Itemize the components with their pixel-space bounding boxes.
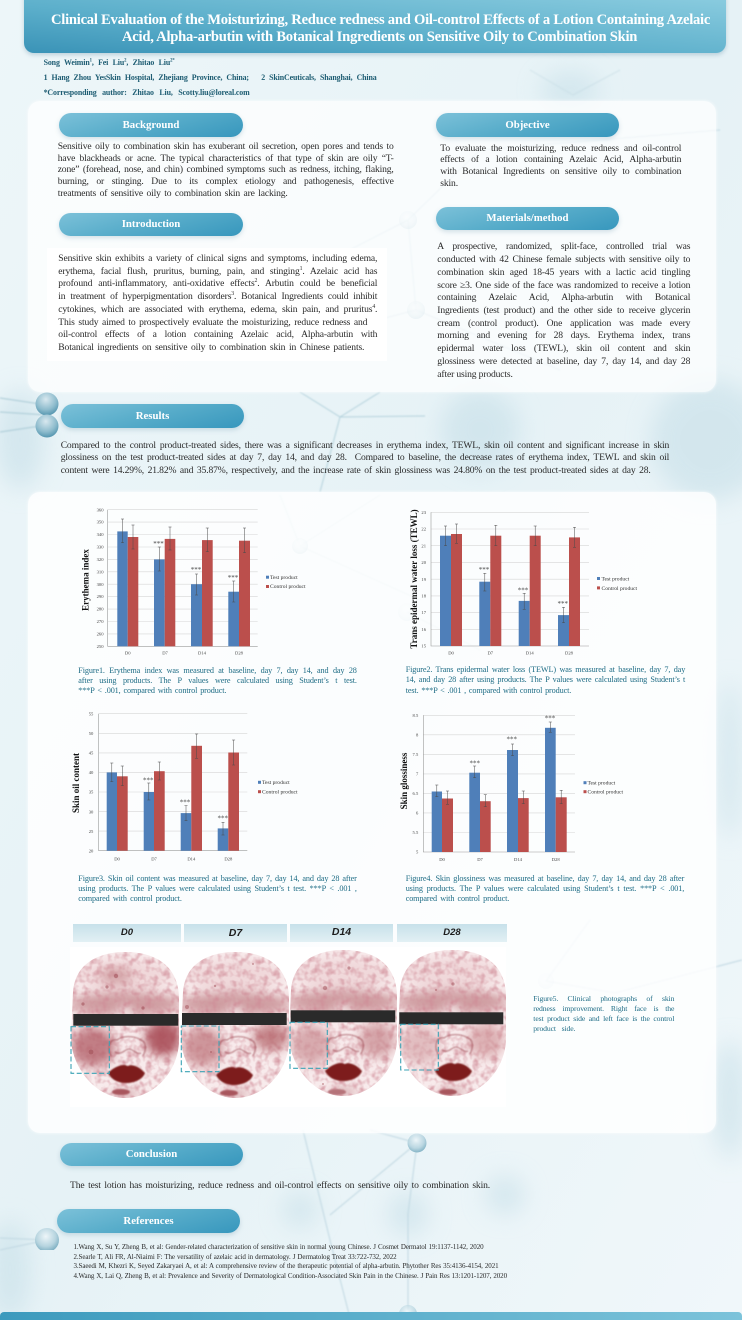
text: conclusion: The test lotion has moisturizing, reduce redness and oil-control effects on sensitive oily to combination skin.: [70, 1180, 490, 1191]
bar chart: skin glossiness: D0: [439, 857, 446, 862]
bar chart: skin oil content: 25: [89, 829, 94, 834]
text: background: Sensitive oily to combination skin has exuberant oil secretion, open pores and tends to: [58, 141, 394, 152]
label: D7: D7: [229, 927, 242, 939]
text: materials and method: after using products.: [437, 369, 513, 380]
text: materials and method: A prospective, randomized, split-face, controlled trial was: [437, 241, 690, 252]
heading: Introduction: Introduction: [122, 218, 180, 230]
bar chart: skin glossiness: Control product: [588, 790, 624, 796]
caption: figure 2: 14, and day 28 after using products. The P values were calculated using Student’s t: [406, 675, 685, 684]
bar chart: erythema index: 290: [97, 594, 104, 599]
caption: figure 2: test. ***P < .001 , compared with control product.: [406, 686, 571, 695]
heading: Background: Background: [123, 119, 179, 131]
text: background: zone” (forehead, nose, and chin) combined symptoms such as redness, itching, flaking,: [58, 164, 394, 175]
caption: figure 1: after using products. The P values were calculated using Student’s t test.: [78, 676, 357, 685]
bar chart: skin glossiness: [399, 713, 624, 862]
bar chart: skin glossiness: Test product: [588, 781, 616, 787]
caption: figure 2: [406, 665, 686, 695]
text: materials and method: combination skin aged 18-45 years with a lactic acid tingling: [437, 267, 690, 278]
authors and affiliations: Song Weimin1, Fei Liu2, Zhitao Liu2*: [44, 58, 175, 67]
bar chart: skin oil content: ***: [217, 815, 228, 823]
bar chart: erythema index: 360: [97, 507, 104, 512]
heading: Results: Results: [136, 410, 169, 422]
bar chart: skin oil content: 50: [89, 731, 94, 736]
bar chart: erythema index: 280: [97, 607, 104, 612]
bar chart: skin oil content: D0: [114, 856, 121, 861]
heading: Materials/method: [436, 207, 619, 230]
bar chart: trans epidermal water loss: 16: [421, 627, 427, 632]
bar chart: erythema index: Erythema index: [80, 549, 90, 611]
text: objective: with Botanical Ingredients on sensitive oily to combination: [440, 166, 681, 177]
bar chart: skin glossiness: 7: [416, 772, 419, 777]
bar chart: trans epidermal water loss: ***: [557, 600, 568, 608]
bar chart: trans epidermal water loss: 23: [421, 510, 427, 515]
bar chart: erythema index: 300: [97, 582, 104, 587]
heading: References: [57, 1209, 240, 1233]
face: D0: [69, 950, 181, 1100]
caption: figure 3: using products. The P values were calculated using Student’s t test. ***P < .001 ,: [78, 884, 357, 893]
bar chart: skin oil content: 45: [89, 751, 94, 756]
bar chart: skin glossiness: D28: [552, 857, 560, 862]
text: introduction: in treatment of hyperpigmentation disorders3. Botanical Ingredients could inhibit: [58, 291, 377, 302]
bar chart: erythema index: ***: [191, 566, 202, 574]
label: D14: [290, 924, 393, 942]
bar chart: trans epidermal water loss: ***: [518, 587, 529, 595]
bar chart: trans epidermal water loss: 17: [421, 610, 427, 615]
bar chart: trans epidermal water loss: [409, 509, 638, 656]
heading: Materials/method: Materials/method: [486, 212, 569, 224]
heading: Objective: Objective: [505, 119, 550, 131]
bar chart: erythema index: Control product: [270, 584, 306, 590]
text: materials and method: conducted with 42 Chinese female subjects with sensitive oily to: [437, 254, 690, 265]
label: D0: [73, 924, 181, 942]
label: D28: D28: [443, 927, 461, 938]
bar chart: skin oil content: D28: [224, 856, 233, 861]
authors and affiliations: [43, 58, 468, 1160]
text: background: [58, 141, 394, 199]
text: background: treatments of sensitive oily to combination skin are lacking.: [58, 188, 288, 199]
text: introduction: Sensitive skin exhibits a variety of clinical signs and symptoms, including edema,: [58, 253, 377, 264]
bar chart: skin glossiness: ***: [506, 735, 517, 743]
text: results: content were 14.29%, 21.82% and 35.87%, respectively, and the increase rate of skin glossiness was 24.80% on the test product-treated sides at day 28.: [61, 465, 651, 476]
bar chart: trans epidermal water loss: 19: [421, 577, 427, 582]
bar chart: skin oil content: 30: [89, 809, 94, 814]
caption: figure 1: ***P < .001, compared with control product.: [78, 686, 226, 695]
bar chart: erythema index: D14: [198, 651, 207, 656]
bar chart: trans epidermal water loss: 15: [421, 644, 427, 649]
caption: figure 3: compared with control product.: [78, 894, 182, 903]
text: results: [61, 440, 670, 476]
bar chart: skin oil content: [71, 711, 298, 861]
bar chart: trans epidermal water loss: 21: [421, 543, 427, 548]
text: references: 1.Wang X, Su Y, Zheng B, et al: Gender-related characterization of sensitive skin in normal young Chinese. J Cosmet Dermatol 19:1137-1142, 2020: [74, 1243, 484, 1251]
bar chart: skin oil content: D7: [151, 856, 158, 861]
bar chart: trans epidermal water loss: 20: [421, 560, 427, 565]
bar chart: erythema index: 330: [97, 545, 104, 550]
caption: figure 5: redness improvement. Right face is the: [533, 1004, 674, 1013]
caption: figure 4: compared with control product.: [406, 894, 509, 903]
title banner: Acid, Alpha-arbutin with Botanical Ingredients on Sensitive Oily to Combination Skin: [122, 29, 637, 45]
bar chart: trans epidermal water loss: D7: [487, 651, 494, 656]
face: D28: [396, 948, 508, 1098]
text: background: burning, or stinging. Due to its complex etiology and pathogenesis, effective: [58, 176, 394, 187]
caption: figure 5: test product side and left face is the control: [533, 1014, 674, 1023]
bar chart: erythema index: 310: [97, 569, 104, 574]
heading: Background: [59, 113, 243, 137]
text: introduction: [47, 248, 387, 361]
text: references: 4.Wang X, Lai Q, Zheng B, et al: Prevalence and Severity of Dermatological Condition-Associated Skin Pain in the Chinese. J Pain Res 13:1201-1207, 2020: [74, 1272, 507, 1280]
bar chart: erythema index: 270: [97, 619, 104, 624]
caption: figure 5: Figure5. Clinical photographs of skin: [533, 994, 674, 1003]
icon: twin spheres: [36, 392, 58, 438]
bar chart: skin oil content: Test product: [262, 780, 290, 786]
title banner: [24, 0, 726, 53]
panel: top content: [28, 101, 716, 392]
bar chart: trans epidermal water loss: Test product: [602, 576, 630, 582]
label: D14: D14: [332, 926, 351, 938]
caption: figure 3: Figure3. Skin oil content was measured at baseline, day 7, day 14, and day 28 after: [78, 874, 357, 883]
bar chart: skin oil content: Control product: [262, 790, 298, 796]
bar chart: skin oil content: ***: [143, 776, 154, 784]
bar chart: erythema index: 350: [97, 520, 104, 525]
bar chart: skin glossiness: 6.5: [413, 791, 419, 796]
bar chart: skin oil content: 55: [89, 711, 94, 716]
text: introduction: erythema, facial flush, pruritus, burning, pain, and stinging1. Azelaic acid has: [58, 266, 377, 277]
caption: figure 4: Figure4. Skin glossiness was measured at baseline, day 7, day 14, and day 28 after: [406, 874, 684, 883]
bar chart: erythema index: ***: [153, 540, 164, 548]
caption: figure 5: [533, 994, 674, 1033]
bar chart: erythema index: 260: [97, 632, 104, 636]
bar chart: skin glossiness: 5: [416, 850, 419, 855]
text: objective: To evaluate the moisturizing, reduce redness and oil-control: [440, 143, 681, 154]
bar chart: skin glossiness: ***: [469, 760, 480, 768]
heading: Results: [61, 404, 244, 428]
bar chart: skin oil content: 40: [89, 770, 94, 775]
heading: Conclusion: Conclusion: [126, 1148, 177, 1160]
text: references: [74, 1243, 507, 1280]
face: D14: [287, 948, 399, 1098]
bar chart: skin glossiness: 8.5: [413, 713, 419, 718]
bar chart: skin glossiness: Skin glossiness: [399, 752, 409, 809]
heading: References: References: [123, 1215, 174, 1227]
bar chart: trans epidermal water loss: Control product: [602, 586, 638, 592]
authors and affiliations: 1 Hang Zhou YesSkin Hospital, Zhejiang Province, China; 2 SkinCeuticals, Shanghai, China: [44, 73, 377, 82]
bar chart: trans epidermal water loss: D0: [448, 651, 455, 656]
text: materials and method: glossiness were detected at baseline, day 7, day 14, and day 28: [437, 356, 690, 367]
bar chart: erythema index: [80, 507, 306, 656]
bar chart: erythema index: D0: [125, 651, 131, 656]
caption: figure 4: [406, 874, 684, 903]
bar chart: erythema index: 320: [97, 557, 104, 562]
footer banner: [0, 1312, 742, 1320]
bar chart: skin glossiness: D14: [514, 857, 523, 862]
bar chart: skin oil content: ***: [180, 799, 191, 807]
bar chart: erythema index: 250: [97, 644, 104, 649]
bar chart: skin oil content: Skin oil content: [71, 753, 81, 813]
face: D7: [179, 950, 291, 1100]
caption: figure 3: [78, 874, 357, 903]
text: introduction: oil-control effects of a lotion containing Azelaic acid, Alpha-arbutin with: [58, 329, 377, 340]
panel: results figures: [28, 492, 716, 1133]
bar chart: skin oil content: D14: [187, 856, 196, 861]
caption: figure 5: product side.: [533, 1024, 575, 1033]
caption: figure 1: [78, 666, 357, 695]
bar chart: trans epidermal water loss: ***: [479, 566, 490, 574]
text: objective: [440, 143, 682, 189]
text: objective: skin.: [440, 178, 458, 189]
bar chart: trans epidermal water loss: D14: [526, 651, 534, 656]
text: results: Compared to the control product-treated sides, there was a significant decreases in erythema index, TEWL, skin oil content and significant increase in skin: [61, 440, 669, 451]
bar chart: skin glossiness: ***: [545, 715, 556, 723]
text: introduction: profound anti-inflammatory, anti-oxidative effects2. Arbutin could be beneficial: [58, 278, 377, 289]
heading: Conclusion: [60, 1143, 243, 1166]
text: references: 3.Saeedi M, Khezri K, Seyed Zakaryaei A, et al: A comprehensive review of the therapeutic potential of alpha-arbutin. Phytother Res 35:4136-4154, 2021: [74, 1262, 498, 1270]
bar chart: trans epidermal water loss: 22: [421, 527, 427, 532]
title banner: Clinical Evaluation of the Moisturizing, Reduce redness and Oil-control Effects of a Lotion Containing Azelaic: [51, 12, 710, 28]
bar chart: trans epidermal water loss: D28: [565, 651, 574, 656]
text: introduction: Botanical ingredients on sensitive oily to combination skin in Chinese patients.: [58, 342, 364, 353]
text: objective: effects of a lotion containing Azelaic Acid, Alpha-arbutin: [440, 154, 681, 165]
label: D0: D0: [121, 927, 133, 938]
caption: figure 2: Figure2. Trans epidermal water loss (TEWL) was measured at baseline, day 7, day: [406, 665, 685, 674]
authors and affiliations: *Corresponding author: Zhitao Liu, Scotty.liu@loreal.com: [44, 88, 250, 97]
text: materials and method: morning and evening for 28 days. Erythema index, trans: [437, 330, 690, 341]
bar chart: trans epidermal water loss: Trans epidermal water loss (TEWL): [409, 509, 419, 649]
bar chart: erythema index: Test product: [270, 575, 298, 581]
caption: figure 1: Figure1. Erythema index was measured at baseline, day 7, day 14, and day 28: [78, 666, 357, 674]
bar chart: erythema index: D28: [235, 651, 244, 656]
bar chart: skin oil content: 35: [89, 790, 94, 795]
caption: figure 4: using products. The P values were calculated using Student’s t test. ***P < .001,: [406, 884, 684, 893]
text: materials and method: epidermal water loss (TEWL), skin oil content and skin: [437, 343, 690, 354]
bar chart: skin glossiness: 8: [416, 732, 419, 738]
bar chart: erythema index: 340: [97, 532, 104, 537]
bar chart: skin oil content: 20: [89, 848, 94, 853]
bar chart: trans epidermal water loss: 18: [421, 594, 427, 598]
clinical photographs: four faces: [70, 950, 506, 1098]
text: materials and method: [437, 241, 690, 380]
bar chart: skin glossiness: 7.5: [413, 752, 419, 757]
label: D7: [184, 924, 287, 942]
text: results: glossiness on the test product-treated sides at day 7, day 14, and day 28. Compared to baseline, the decrease rates of erythema index, TEWL and skin oil: [61, 452, 669, 463]
text: materials and method: score ≥3. One side of the face was randomized to receive a lotion: [437, 280, 690, 290]
bar chart: skin glossiness: 6: [416, 811, 419, 816]
bar chart: erythema index: ***: [228, 574, 239, 582]
text: materials and method: containing Azelaic Acid, Alpha-arbutin with Botanical: [437, 292, 690, 303]
text: materials and method: cream (control product). One application was made every: [437, 318, 690, 329]
text: background: have blackheads or acne. The typical characteristics of that type of skin are oily “T-: [58, 153, 394, 164]
bar chart: skin glossiness: D7: [477, 857, 484, 862]
heading: Objective: [436, 113, 619, 137]
text: introduction: cytokines, which are associated with erythema, edema, skin pain, and pruritus4.: [58, 304, 377, 315]
bar chart: erythema index: D7: [162, 651, 169, 656]
text: introduction: This study aimed to prospectively evaluate the moisturizing, reduce redness and: [58, 317, 367, 328]
label: D28: [397, 924, 507, 942]
text: references: 2.Searle T, Ali FR, Al-Niaimi F: The versatility of azelaic acid in dermatology. J Dermatolog Treat 33:722-732, 2022: [74, 1253, 396, 1261]
bar chart: skin glossiness: 5.5: [413, 830, 419, 835]
heading: Introduction: [59, 213, 243, 236]
text: materials and method: Ingredients (test product) and the other side to receive glycerin: [437, 305, 690, 316]
